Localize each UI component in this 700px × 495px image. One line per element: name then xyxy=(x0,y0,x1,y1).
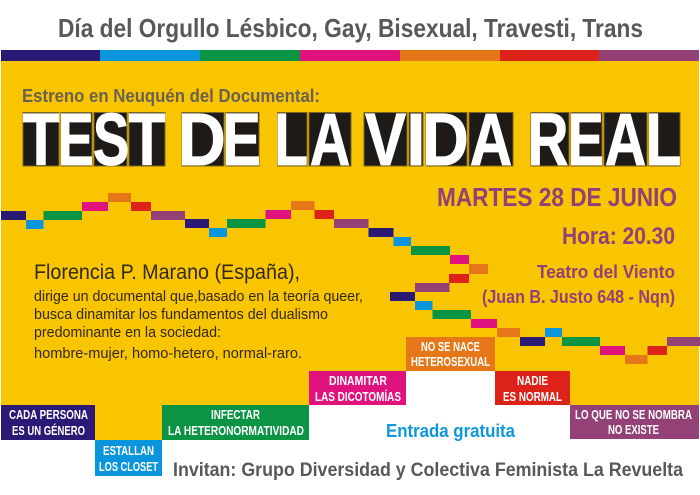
box: lo que no se nombra no existe: NO EXISTE xyxy=(608,422,659,437)
description text block xyxy=(34,261,363,362)
main title: TEST DE LA VIDA REAL: D xyxy=(178,98,226,181)
time: Hora: 20.30 xyxy=(562,223,675,250)
box: estallan los closet xyxy=(95,440,162,476)
main title: TEST DE LA VIDA REAL: A xyxy=(605,98,646,181)
box: cada persona es un género: CADA PERSONA xyxy=(9,407,88,422)
description text block: busca dinamitar los fundamentos del dualismo xyxy=(34,307,328,323)
main title: TEST DE LA VIDA REAL: T xyxy=(128,98,166,181)
box: infectar la heteronormatividad xyxy=(162,405,309,440)
box: infectar la heteronormatividad: LA HETERONORMATIVIDAD xyxy=(168,423,304,438)
description text block: predominante en la sociedad: xyxy=(34,325,221,341)
intro line: Estreno en Neuquén del Documental: xyxy=(22,85,320,106)
description text block: hombre-mujer, homo-hetero, normal-raro. xyxy=(34,346,302,362)
main title: TEST DE LA VIDA REAL: E xyxy=(223,98,261,181)
box: lo que no se nombra no existe xyxy=(570,405,699,439)
main title: TEST DE LA VIDA REAL: E xyxy=(568,98,604,181)
box: nadie es normal: NADIE xyxy=(517,373,548,388)
yellow stepped background panel xyxy=(1,61,699,440)
main title: TEST DE LA VIDA REAL: A xyxy=(470,98,512,181)
main title: TEST DE LA VIDA REAL: L xyxy=(645,98,681,181)
box: cada persona es un género: ES UN GÉNERO xyxy=(12,423,85,438)
address: (Juan B. Justo 648 - Nqn) xyxy=(482,286,675,307)
box: no se nace heterosexual: HETEROSEXUAL xyxy=(411,354,490,369)
box: infectar la heteronormatividad: INFECTAR xyxy=(211,407,260,422)
box: no se nace heterosexual: NO SE NACE xyxy=(421,339,480,354)
main title: TEST DE LA VIDA REAL: I xyxy=(406,98,426,181)
box: dinamitar las dicotomías: LAS DICOTOMÍAS xyxy=(315,389,401,404)
stepped rainbow ribbon xyxy=(1,193,700,364)
main title: TEST DE LA VIDA REAL: T xyxy=(22,98,60,181)
description text block: dirige un documental que,basado en la teoría queer, xyxy=(34,289,363,305)
box: estallan los closet: LOS CLOSET xyxy=(99,459,158,474)
main title: TEST DE LA VIDA REAL: R xyxy=(528,98,568,181)
free entry note: Entrada gratuita xyxy=(386,420,516,441)
rainbow colour bar xyxy=(1,50,699,61)
main title: TEST DE LA VIDA REAL: S xyxy=(93,98,129,181)
box: nadie es normal xyxy=(495,371,570,405)
main title: TEST DE LA VIDA REAL: D xyxy=(422,98,469,181)
box: nadie es normal: ES NORMAL xyxy=(503,389,562,404)
main title: TEST DE LA VIDA REAL: A xyxy=(310,98,350,181)
main title: TEST DE LA VIDA REAL: V xyxy=(365,98,406,181)
box: cada persona es un género xyxy=(1,405,95,440)
main title: TEST DE LA VIDA REAL: L xyxy=(274,98,308,181)
main title: TEST DE LA VIDA REAL xyxy=(22,98,681,181)
main title: TEST DE LA VIDA REAL: E xyxy=(58,98,94,181)
venue: Teatro del Viento xyxy=(537,261,675,282)
box: estallan los closet: ESTALLAN xyxy=(103,443,154,458)
description text block: Florencia P. Marano (España), xyxy=(34,261,300,284)
box: dinamitar las dicotomías xyxy=(309,371,406,405)
box: dinamitar las dicotomías: DINAMITAR xyxy=(329,373,387,388)
box: no se nace heterosexual xyxy=(406,337,495,371)
